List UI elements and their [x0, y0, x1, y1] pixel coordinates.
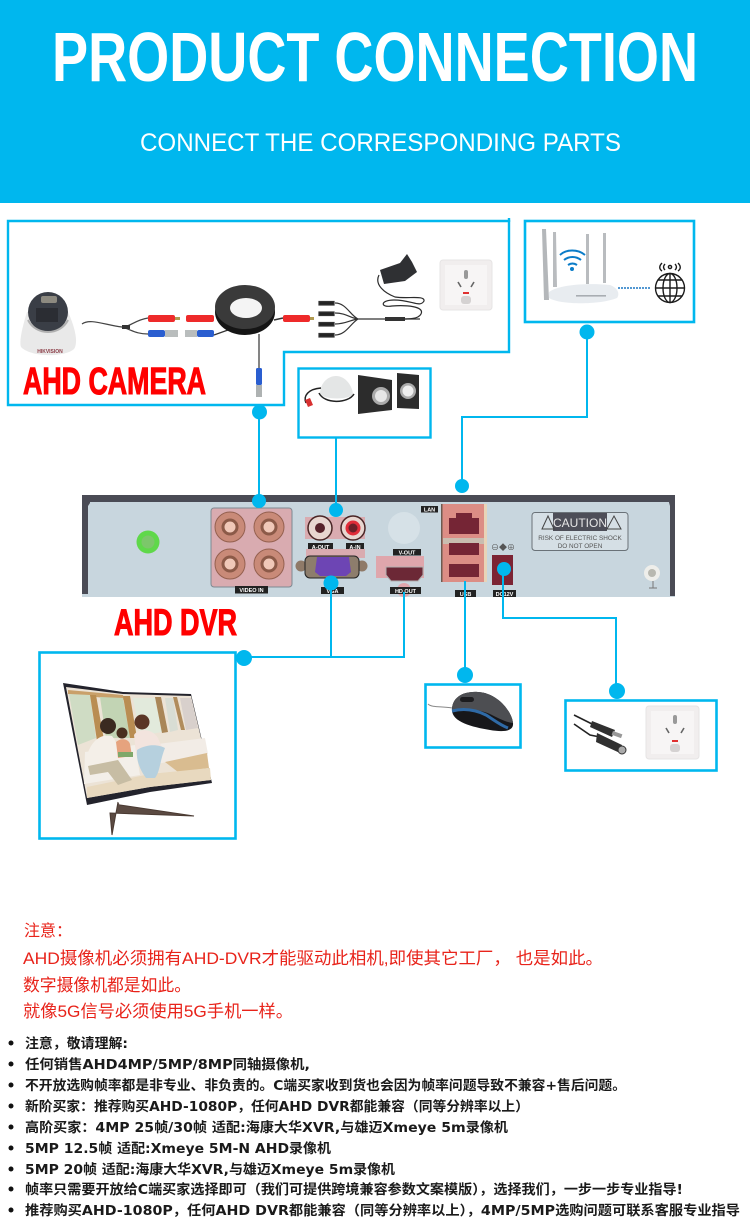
port: VGA — [296, 549, 368, 595]
panel: microphone and speakers — [298, 368, 430, 438]
panel: router and internet — [525, 221, 694, 322]
icon: mouse cable — [428, 704, 452, 708]
monitor screen: family photo — [66, 687, 211, 798]
red notice text — [23, 921, 603, 1021]
bullet list: 5MP 12.5帧 适配:Xmeye 5M-N AHD录像机 — [25, 1140, 332, 1157]
bullet list: 新阶买家：推荐购买AHD-1080P，任何AHD DVR都能兼容（同等分辨率以上） — [25, 1098, 529, 1115]
icon: monitor stand — [110, 802, 194, 835]
icon: BNC power cable with coil — [82, 285, 314, 397]
icon: dome camera: HIKVISION — [37, 349, 63, 355]
port: audio: A-IN — [349, 545, 361, 551]
port: HDMI — [376, 556, 424, 597]
port: audio: A-OUT — [312, 545, 330, 551]
panel: monitor — [40, 652, 236, 838]
port: VGA: VGA — [327, 589, 338, 595]
connector lines — [244, 332, 616, 691]
icon: power splitter — [319, 302, 420, 337]
port: video in: VIDEO IN — [239, 588, 264, 594]
caution label — [532, 512, 628, 550]
icon: dome camera — [20, 292, 76, 355]
icon: wall socket — [440, 260, 492, 310]
icon: globe — [655, 263, 685, 303]
bullet list: 任何销售AHD4MP/5MP/8MP同轴摄像机, — [25, 1056, 310, 1073]
panel: mouse — [426, 684, 520, 748]
cable coil — [215, 289, 275, 335]
icon: speakers — [358, 373, 419, 414]
icon: wall socket — [646, 706, 699, 759]
panel: AHD DVR rear view — [82, 495, 675, 598]
red notice text: 就像5G信号必须使用5G手机一样。 — [23, 1001, 293, 1021]
port: DC 12V — [491, 543, 516, 598]
port: LAN and USB: USB — [460, 592, 471, 598]
caution label: RISK OF ELECTRIC SHOCK — [538, 535, 622, 542]
red notice text: AHD摄像机必须拥有AHD-DVR才能驱动此相机,即使其它工厂， 也是如此。 — [23, 948, 603, 968]
bullet list: 注意，敬请理解: — [25, 1035, 128, 1052]
ground screw — [644, 565, 660, 588]
caution label: CAUTION — [553, 516, 607, 530]
bullet list: 帧率只需要开放给C端买家选择即可（我们可提供跨境兼容参数文案模版），选择我们，一步一步专业指导! — [25, 1181, 683, 1198]
label: AHD DVR: AHD DVR — [114, 602, 237, 643]
icon: wifi — [560, 250, 585, 270]
bullet list — [8, 1035, 740, 1219]
port: V-OUT: V-OUT — [399, 550, 416, 556]
header banner — [0, 0, 750, 203]
icon: microphone — [305, 376, 354, 407]
port: audio — [305, 516, 365, 551]
icon: power adapter — [378, 254, 424, 321]
icon: curved monitor — [63, 683, 212, 805]
port: LAN and USB — [421, 504, 487, 598]
indicator: green terminal — [136, 530, 160, 554]
icon: computer mouse — [452, 692, 513, 731]
connector dots — [236, 324, 625, 699]
icon: DC cable — [574, 715, 626, 754]
label: AHD CAMERA: AHD CAMERA — [23, 361, 206, 403]
bullet list: 5MP 20帧 适配:海康大华XVR,与雄迈Xmeye 5m录像机 — [25, 1161, 396, 1178]
icon: router — [542, 229, 618, 303]
red notice text: 数字摄像机都是如此。 — [23, 976, 191, 995]
bullet list: 推荐购买AHD-1080P，任何AHD DVR都能兼容（同等分辨率以上），4MP/5MP选购问题可联系客服专业指导 — [25, 1202, 740, 1219]
port: HDMI: HD OUT — [395, 589, 417, 595]
connection line — [618, 287, 651, 289]
panel: power supply — [566, 700, 716, 770]
caution label: DO NOT OPEN — [558, 543, 603, 550]
port: DC 12V: ⊖◆⊕ — [491, 543, 515, 552]
bullet list: 高阶买家：4MP 25帧/30帧 适配:海康大华XVR,与雄迈Xmeye 5m录像机 — [25, 1119, 509, 1136]
bullet list: 不开放选购帧率都是非专业、非负责的。C端买家收到货也会因为帧率问题导致不兼容+售后问题。 — [25, 1077, 626, 1094]
port: LAN and USB: LAN — [424, 508, 435, 514]
red notice text: 注意： — [24, 921, 72, 940]
subtitle: CONNECT THE CORRESPONDING PARTS — [140, 129, 621, 157]
port: video in — [211, 508, 292, 594]
panel: AHD camera kit — [8, 218, 509, 405]
port: V-OUT — [388, 512, 421, 556]
port: DC 12V: DC12V — [496, 592, 514, 598]
